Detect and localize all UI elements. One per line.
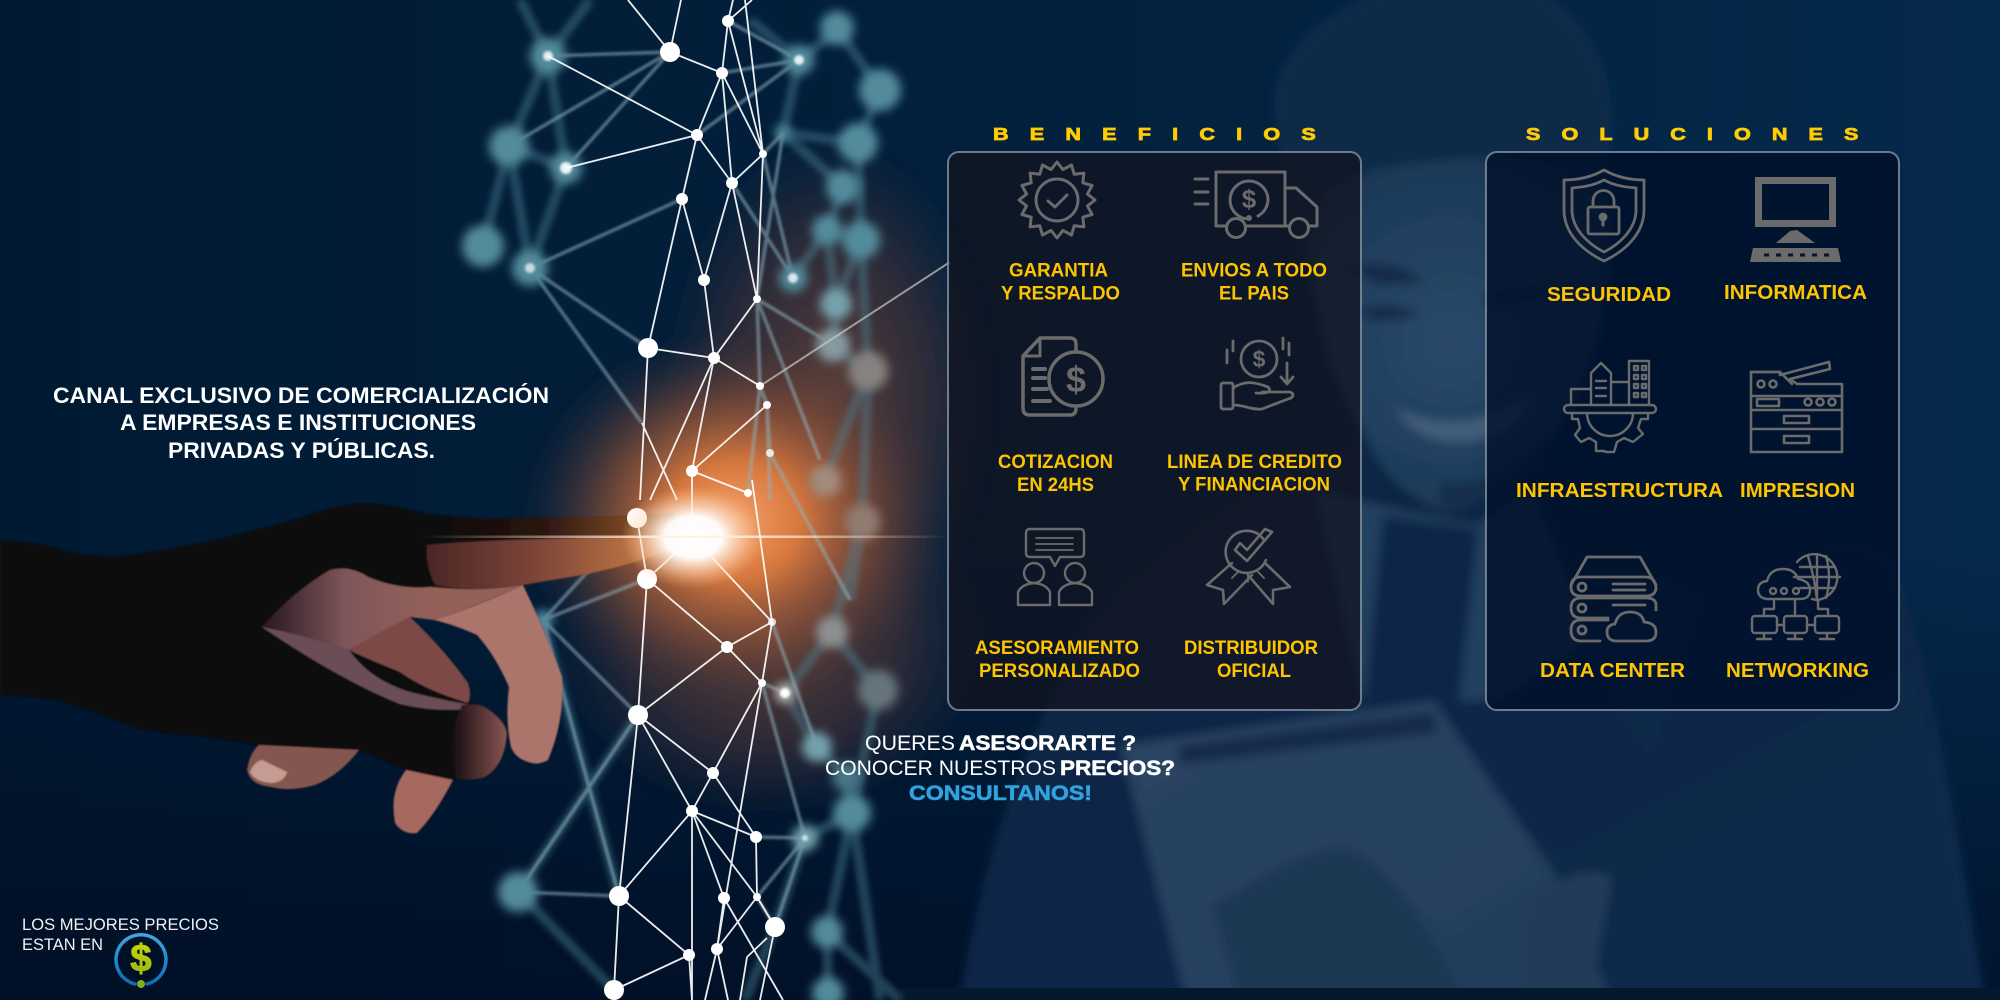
icon: quality badge <box>1019 162 1095 238</box>
beneficios labels: ENVIOS A TODO <box>1181 260 1327 282</box>
call to action: CONSULTANOS! <box>909 781 1092 805</box>
headline text: CANAL EXCLUSIVO DE COMERCIALIZACIÓN <box>53 383 549 408</box>
icon: infrastructure <box>1564 361 1656 452</box>
beneficios labels: LINEA DE CREDITO <box>1167 452 1342 473</box>
thumb ridge <box>262 627 485 710</box>
lower finger with nail <box>247 745 359 789</box>
soluciones labels: DATA CENTER <box>1540 660 1686 682</box>
index finger top <box>427 513 678 545</box>
headline text: A EMPRESAS E INSTITUCIONES <box>120 410 476 435</box>
middle finger <box>434 585 562 764</box>
beneficios labels: PERSONALIZADO <box>979 661 1140 682</box>
logo: dollar ring: $ <box>130 938 152 980</box>
beneficios labels: OFICIAL <box>1217 661 1291 682</box>
palm <box>262 569 523 650</box>
heading: soluciones: SOLUCIONES <box>1526 125 1858 145</box>
footer text: ESTAN EN <box>22 935 103 954</box>
icon: official distributor ribbon <box>1207 529 1290 604</box>
beneficios labels: DISTRIBUIDOR <box>1184 638 1318 659</box>
beneficios labels: Y FINANCIACION <box>1178 474 1330 496</box>
icon: security shield <box>1564 170 1644 261</box>
headline text <box>53 383 549 463</box>
footer text <box>22 915 219 954</box>
index finger underside <box>427 537 676 588</box>
fingertip <box>452 704 507 780</box>
call to action: PRECIOS? <box>1060 756 1175 780</box>
beneficios labels: ASESORAMIENTO <box>975 638 1139 659</box>
call to action <box>825 731 1175 805</box>
icon: hand with coin: $ <box>1253 346 1266 372</box>
soluciones labels <box>1516 282 1869 682</box>
beneficios labels <box>975 260 1342 682</box>
icon: delivery truck: $ <box>1242 184 1257 214</box>
little finger <box>394 770 453 833</box>
orange glow <box>520 130 1000 820</box>
headline text: PRIVADAS Y PÚBLICAS. <box>168 438 435 463</box>
beneficios labels: Y RESPALDO <box>1001 284 1120 304</box>
sharp network <box>548 0 783 1000</box>
hand <box>0 503 678 833</box>
soluciones labels: NETWORKING <box>1726 660 1869 682</box>
light flare at fingertip <box>420 485 950 589</box>
footer note and logo <box>22 915 219 988</box>
icon: printer <box>1751 362 1842 452</box>
icon: quote document <box>1023 338 1103 415</box>
call to action: ASESORARTE ? <box>959 731 1136 755</box>
icon: quote document: $ <box>1066 359 1086 400</box>
beneficios labels: EN 24HS <box>1017 475 1094 496</box>
beneficios labels: COTIZACION <box>998 452 1113 473</box>
panel: soluciones <box>1486 125 1899 710</box>
icon: hand with coin <box>1221 338 1293 409</box>
background photo: businessman <box>960 0 1985 1000</box>
blurred network nodes <box>462 11 901 1000</box>
ring finger <box>349 617 470 703</box>
logo: dollar ring <box>116 935 166 988</box>
icon: desktop computer <box>1750 180 1841 262</box>
beneficios labels: EL PAIS <box>1219 284 1289 304</box>
icon: delivery truck <box>1195 172 1317 238</box>
icon: networking <box>1752 554 1840 639</box>
gray connector line <box>760 262 950 386</box>
soluciones labels: IMPRESION <box>1740 480 1855 502</box>
heading: beneficios: BENEFICIOS <box>993 125 1316 145</box>
footer text: LOS MEJORES PRECIOS <box>22 915 219 934</box>
icon: advisory chat <box>1018 529 1092 605</box>
beneficios labels: GARANTIA <box>1009 260 1108 282</box>
call to action: CONOCER NUESTROS <box>825 756 1056 780</box>
blurred network layer <box>483 0 900 1000</box>
soluciones labels: INFRAESTRUCTURA <box>1516 480 1723 502</box>
soluciones labels: SEGURIDAD <box>1547 284 1671 306</box>
beneficios frame <box>948 152 1361 710</box>
soluciones frame <box>1486 152 1899 710</box>
semi-focused network links <box>509 21 850 927</box>
icon: data center <box>1571 557 1656 641</box>
panel: beneficios <box>948 125 1361 710</box>
soluciones labels: INFORMATICA <box>1724 282 1867 304</box>
blurred node highlights <box>525 51 808 841</box>
sharp nodes <box>604 15 785 1000</box>
call to action: QUERES <box>865 731 955 755</box>
